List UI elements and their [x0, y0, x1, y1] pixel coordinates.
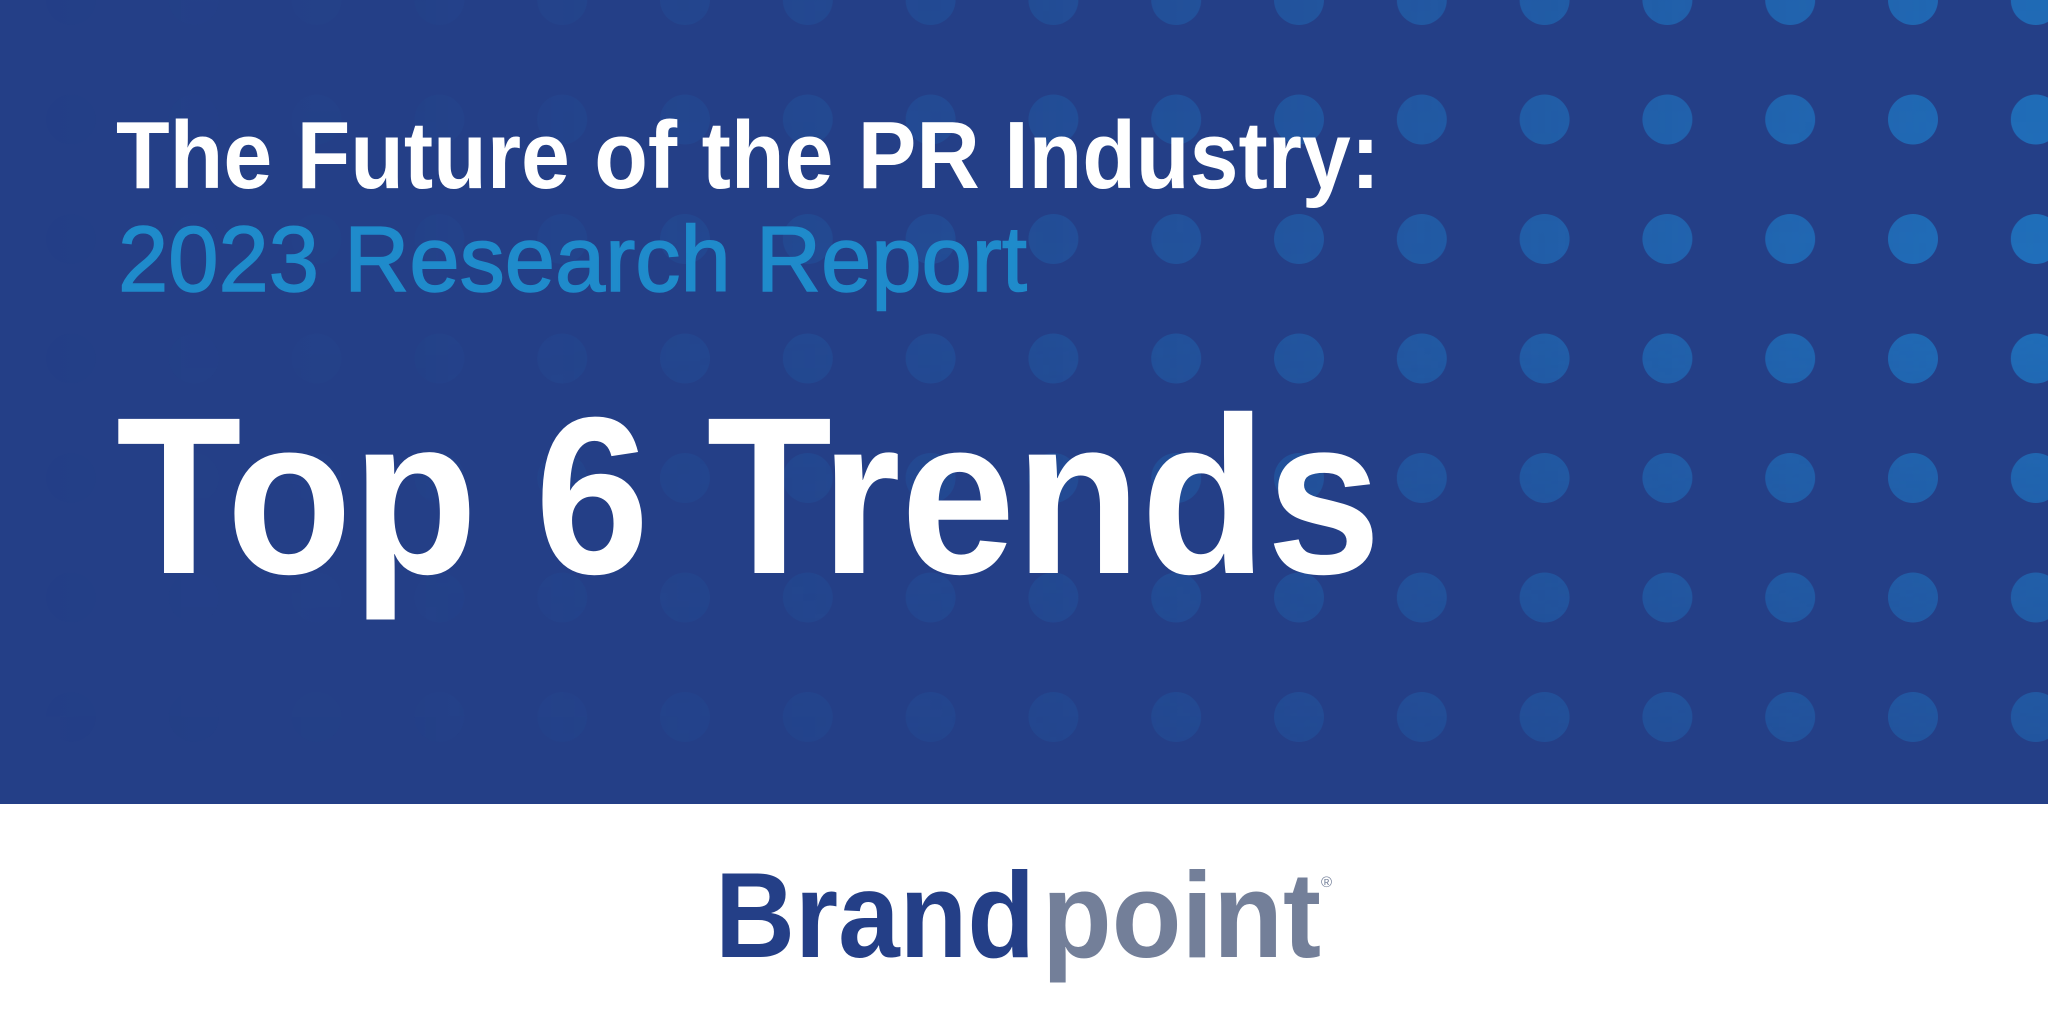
heading: Top 6 Trends: Top 6 Trends [116, 371, 1381, 621]
subtitle: 2023 Research Report: 2023 Research Report [118, 207, 1027, 311]
panel: blue header background [0, 0, 2048, 804]
logo: Brandpoint: point [1042, 847, 1321, 983]
logo: Brandpoint [715, 847, 1332, 983]
title: The Future of the PR Industry: The Future of the PR Industry: [116, 102, 1380, 209]
logo: Brandpoint: ® [1321, 874, 1332, 891]
panel: white footer [0, 804, 2048, 1024]
logo: Brandpoint: Brand [715, 847, 1035, 983]
